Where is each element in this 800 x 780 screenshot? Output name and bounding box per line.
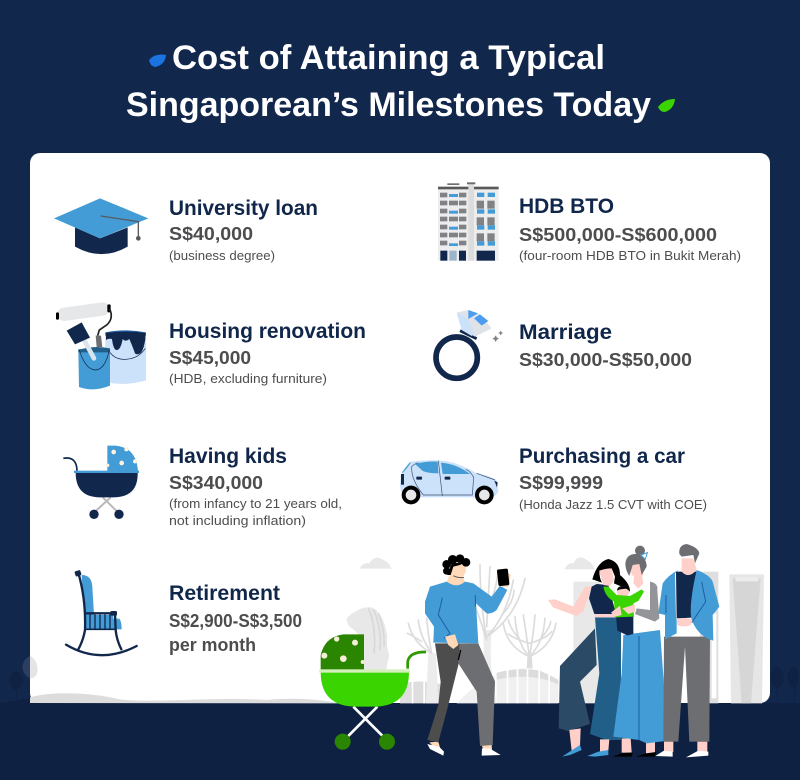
milestone: purchasing a car: S$99,999 bbox=[519, 473, 603, 493]
milestone: having kids bbox=[63, 445, 342, 528]
milestone: having kids: not including inflation) bbox=[169, 513, 306, 528]
milestone: having kids: S$340,000 bbox=[169, 473, 263, 493]
milestone: having kids: Having kids bbox=[169, 445, 287, 468]
milestone: purchasing a car bbox=[400, 445, 707, 512]
icon: paint buckets and roller bbox=[56, 304, 146, 389]
illustration: man taking a selfie bbox=[425, 554, 511, 756]
skyline background bbox=[30, 557, 764, 703]
milestone: university loan bbox=[54, 197, 318, 263]
decorative shrub overlapping card bbox=[30, 656, 38, 678]
title: Singaporean’s Milestones Today bbox=[126, 86, 651, 124]
man in blue jacket bbox=[655, 544, 719, 757]
milestone: HDB BTO: (four-room HDB BTO in Bukit Merah) bbox=[519, 248, 741, 263]
milestone: retirement: S$2,900-S$3,500 bbox=[169, 611, 302, 631]
milestone: HDB BTO bbox=[438, 182, 741, 263]
woman in navy top bbox=[548, 559, 630, 757]
milestone: housing renovation: (HDB, excluding furniture) bbox=[169, 371, 327, 386]
icon: rocking chair bbox=[66, 570, 137, 655]
illustration: family group bbox=[548, 544, 719, 757]
milestone: retirement: Retirement bbox=[169, 582, 280, 605]
milestone: marriage: S$30,000-S$50,000 bbox=[519, 350, 692, 370]
icon: green leaf bbox=[658, 99, 675, 112]
milestone: university loan: University loan bbox=[169, 197, 318, 220]
supertrees bbox=[527, 653, 533, 668]
milestone: housing renovation bbox=[56, 304, 366, 389]
icon: graduation cap bbox=[54, 198, 148, 254]
milestone: housing renovation: Housing renovation bbox=[169, 320, 366, 343]
milestone: HDB BTO: S$500,000-S$600,000 bbox=[519, 225, 717, 245]
milestone: purchasing a car: Purchasing a car bbox=[519, 445, 685, 468]
milestone: university loan: (business degree) bbox=[169, 248, 275, 263]
milestone: purchasing a car: (Honda Jazz 1.5 CVT with COE) bbox=[519, 497, 707, 512]
merlion bbox=[347, 607, 389, 670]
milestone: housing renovation: S$45,000 bbox=[169, 348, 251, 368]
milestone: HDB BTO: HDB BTO bbox=[519, 195, 614, 218]
woman in blue skirt bbox=[613, 546, 668, 757]
illustration: green pram bbox=[319, 634, 426, 750]
icon: blue leaf bbox=[149, 55, 166, 67]
title bbox=[126, 39, 675, 124]
milestone: having kids: (from infancy to 21 years old, bbox=[169, 496, 342, 511]
milestone: marriage: Marriage bbox=[519, 321, 612, 344]
milestone: marriage bbox=[436, 310, 692, 378]
panel: milestones card bbox=[30, 153, 770, 703]
icon: apartment block bbox=[438, 182, 499, 261]
icon: diamond ring bbox=[436, 310, 503, 378]
icon: car bbox=[400, 460, 498, 504]
milestone: university loan: S$40,000 bbox=[169, 224, 253, 244]
dome bbox=[457, 668, 558, 703]
icon: pram bbox=[63, 446, 139, 519]
milestone: retirement: per month bbox=[169, 635, 256, 655]
decorative side shrubs bbox=[9, 656, 799, 703]
buildings bbox=[573, 582, 600, 703]
ground wave bbox=[30, 693, 340, 703]
title: Cost of Attaining a Typical bbox=[172, 39, 605, 77]
baby in green bbox=[603, 586, 644, 635]
milestone: retirement bbox=[66, 570, 302, 655]
